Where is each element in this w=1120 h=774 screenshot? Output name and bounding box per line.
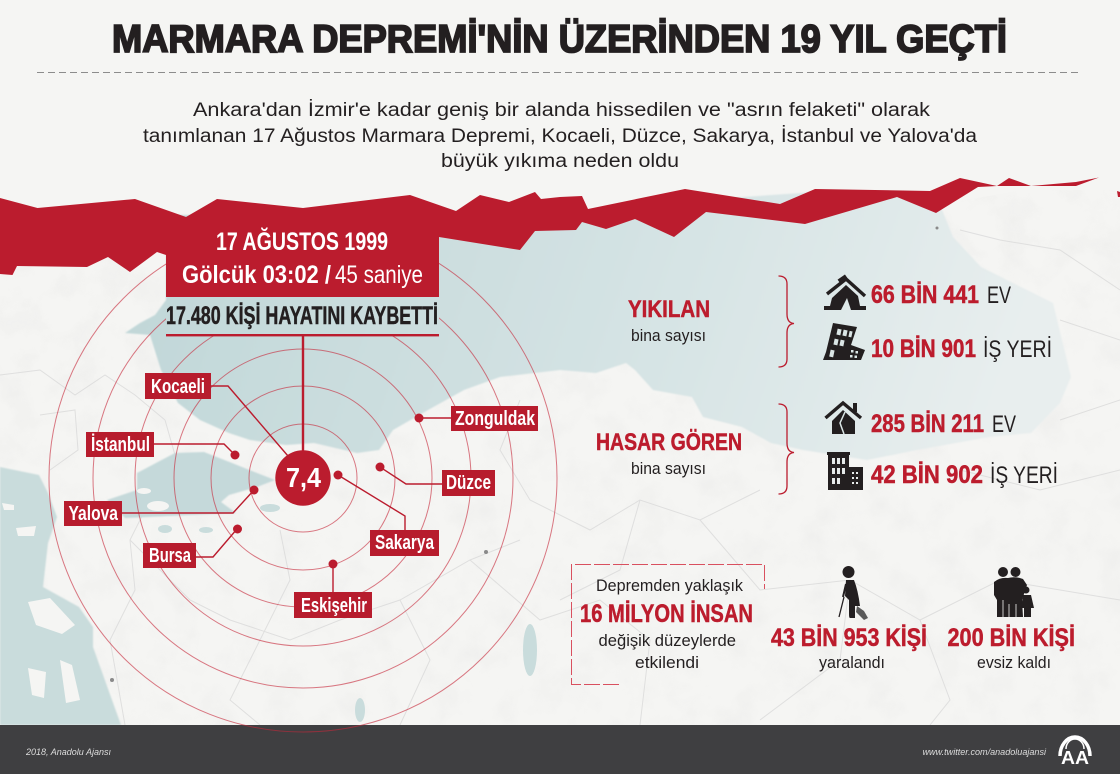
label: Bursa — [143, 524, 242, 568]
stat: homeless — [948, 624, 1075, 672]
icon: Anadolu Agency logo: AA — [1061, 748, 1089, 768]
red fault band — [0, 178, 1099, 275]
label: Sakarya — [334, 470, 439, 556]
brace: destroyed — [778, 276, 794, 367]
footer: www.twitter.com/anadoluajansi — [922, 747, 1047, 758]
small cities — [110, 226, 938, 682]
stat: destroyed workplaces: 10 BİN 901 — [871, 335, 976, 363]
intro text: Ankara'dan İzmir'e kadar geniş bir alanda hissedilen ve "asrın felaketi" olarak — [193, 100, 931, 121]
epicentre magnitude — [275, 450, 331, 506]
callout: 16 million people affected: etkilendi — [635, 653, 699, 672]
heading: damaged buildings — [596, 429, 742, 478]
intro text — [143, 100, 977, 172]
icon: damaged house — [826, 403, 861, 434]
callout: 16 million people affected — [572, 564, 764, 684]
icon: collapsed office — [823, 323, 865, 360]
label: Yalova: Yalova — [68, 503, 119, 525]
callout: 16 million people affected: Depremden yaklaşık — [596, 576, 743, 595]
map background — [0, 190, 1120, 725]
label: Istanbul — [86, 432, 240, 460]
icon: collapsed house — [824, 274, 866, 310]
stat: damaged homes: 285 BİN 211 — [871, 410, 984, 438]
icon: Anadolu Agency logo — [1060, 737, 1090, 768]
label: Zonguldak — [414, 406, 538, 431]
stat: injured: 43 BİN 953 KİŞİ — [771, 624, 927, 652]
label: Eskisehir — [294, 560, 372, 618]
heading: destroyed buildings: YIKILAN — [628, 296, 710, 323]
icon: damaged office — [827, 452, 863, 490]
Black Sea — [125, 192, 1071, 460]
icon: family — [994, 567, 1034, 617]
stat: destroyed homes: EV — [987, 282, 1011, 309]
label: Istanbul: İstanbul — [91, 433, 150, 456]
stat: damaged workplaces — [871, 461, 1058, 489]
stat: damaged homes: EV — [992, 411, 1016, 438]
label: Zonguldak: Zonguldak — [455, 408, 536, 430]
stat: destroyed workplaces — [871, 335, 1052, 363]
brace: damaged — [778, 404, 794, 494]
label: Eskisehir: Eskişehir — [301, 595, 367, 617]
stat: homeless: 200 BİN KİŞİ — [948, 624, 1075, 652]
leader line: Kocaeli — [211, 386, 288, 456]
Sea of Marmara — [107, 452, 275, 518]
callout: 16 million people affected: 16 MİLYON İNSAN — [580, 600, 753, 628]
label: Duzce — [376, 462, 495, 496]
label: Bursa: Bursa — [149, 545, 192, 567]
stat: damaged workplaces: İŞ YERİ — [990, 462, 1058, 489]
epicentre magnitude: 7,4 — [286, 462, 321, 493]
Aegean Sea — [0, 467, 121, 725]
heading: damaged buildings: bina sayısı — [631, 459, 706, 478]
date panel — [166, 227, 439, 297]
label: Duzce: Düzce — [446, 472, 491, 494]
death toll: 17.480 KİŞİ HAYATINI KAYBETTİ — [166, 302, 438, 330]
label: Yalova — [64, 486, 258, 526]
label: Kocaeli — [145, 373, 211, 399]
heading: destroyed buildings — [628, 296, 710, 345]
intro text: tanımlanan 17 Ağustos Marmara Depremi, Kocaeli, Düzce, Sakarya, İstanbul ve Yalova'da — [143, 126, 977, 147]
stat: destroyed homes: 66 BİN 441 — [871, 281, 979, 309]
stat: damaged workplaces: 42 BİN 902 — [871, 461, 983, 489]
label: Kocaeli: Kocaeli — [151, 376, 205, 398]
footer: 2018, Anadolu Ajansı — [25, 747, 111, 758]
epicentre line — [302, 336, 304, 452]
footer — [0, 725, 1120, 774]
icon: injured person — [839, 566, 868, 620]
seismic rings — [49, 224, 557, 732]
label: Sakarya: Sakarya — [375, 532, 435, 554]
date panel: 45 saniye — [335, 261, 423, 289]
heading: damaged buildings: HASAR GÖREN — [596, 429, 742, 456]
stat: destroyed workplaces: İŞ YERİ — [983, 336, 1052, 363]
date panel: Gölcük 03:02 / — [182, 261, 331, 289]
intro text: büyük yıkıma neden oldu — [441, 151, 679, 172]
stat: homeless: evsiz kaldı — [977, 653, 1051, 672]
stat: injured — [771, 624, 927, 672]
callout: 16 million people affected: değişik düzeylerde — [598, 631, 736, 650]
date panel: 17 AĞUSTOS 1999 — [216, 227, 388, 256]
title: MARMARA DEPREMİ'NİN ÜZERİNDEN 19 YIL GEÇTİ — [112, 18, 1007, 61]
stat: injured: yaralandı — [819, 653, 885, 672]
heading: destroyed buildings: bina sayısı — [631, 326, 706, 345]
